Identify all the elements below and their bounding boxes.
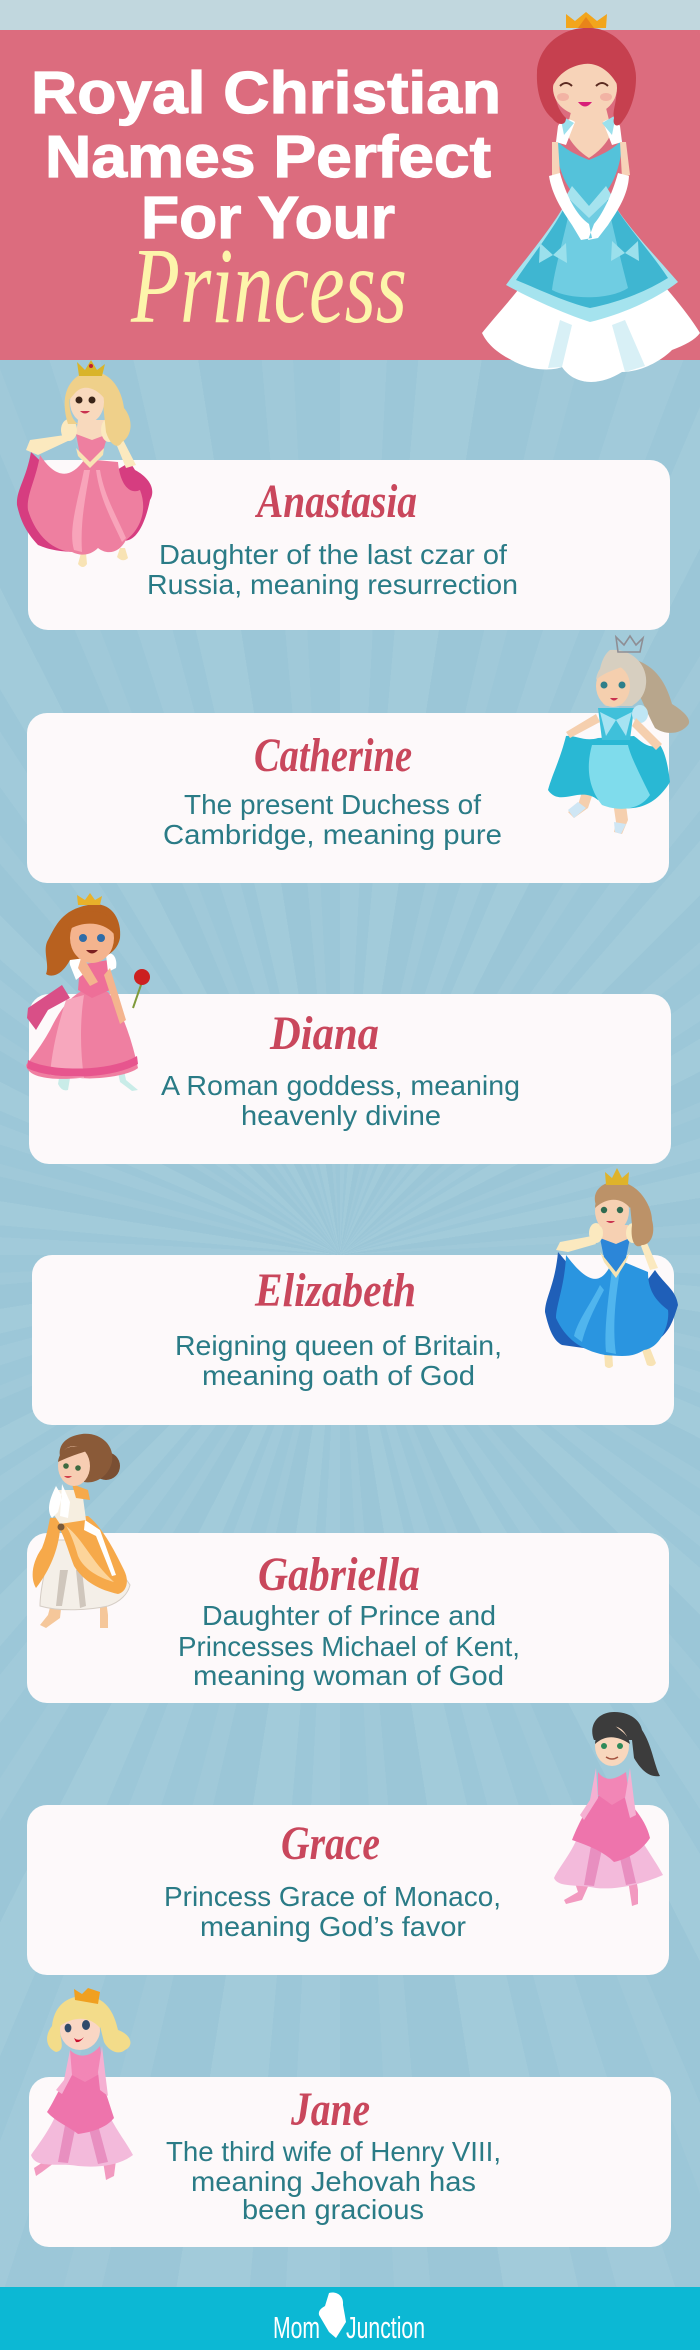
icon: princess in orange and white gown xyxy=(33,1434,130,1628)
description: Jane: The third wife of Henry VIII, xyxy=(166,2136,501,2167)
name: Gabriella: Gabriella xyxy=(258,1548,420,1601)
card: Catherine xyxy=(27,713,669,883)
description: Diana: heavenly divine xyxy=(241,1100,441,1131)
name: Diana: Diana xyxy=(269,1007,379,1060)
description: Anastasia: Russia, meaning resurrection xyxy=(147,569,518,600)
description: Grace xyxy=(164,1881,501,1942)
description: Diana: A Roman goddess, meaning xyxy=(161,1070,520,1101)
card: Jane xyxy=(29,2077,671,2247)
description: Gabriella: Daughter of Prince and xyxy=(202,1600,496,1631)
icon: princess in pink gown, blonde xyxy=(17,360,152,567)
logo: MomJunction: Junction xyxy=(346,2310,425,2345)
description: Grace: meaning God’s favor xyxy=(200,1911,466,1942)
icon: princess in pink gown, black ponytail xyxy=(554,1712,663,1906)
icon: princess in pink gown, blonde curls xyxy=(31,1988,133,2180)
description: Jane: meaning Jehovah has xyxy=(191,2166,476,2197)
header banner xyxy=(0,30,700,360)
icon: princess with rose in pink dress xyxy=(26,893,150,1091)
description: Grace: Princess Grace of Monaco, xyxy=(164,1881,501,1912)
card: Anastasia xyxy=(28,460,670,630)
name: Catherine: Catherine xyxy=(254,729,412,782)
description: Anastasia xyxy=(147,539,518,600)
card: Diana xyxy=(29,994,671,1164)
card: Gabriella xyxy=(27,1533,669,1703)
logo: MomJunction: Mom xyxy=(273,2310,320,2345)
description: Elizabeth: Reigning queen of Britain, xyxy=(175,1330,502,1361)
description: Elizabeth: meaning oath of God xyxy=(202,1360,475,1391)
description: Gabriella xyxy=(178,1600,520,1691)
description: Catherine xyxy=(163,789,502,850)
description: Jane: been gracious xyxy=(242,2194,424,2225)
title: Princess xyxy=(130,227,407,346)
description: Gabriella: meaning woman of God xyxy=(193,1660,504,1691)
logo: MomJunction xyxy=(273,2293,425,2345)
name: Anastasia: Anastasia xyxy=(255,475,417,528)
name: Elizabeth: Elizabeth xyxy=(254,1264,416,1317)
title xyxy=(31,60,501,346)
title: For Your xyxy=(141,185,395,251)
description: Jane xyxy=(166,2136,501,2225)
footer bar xyxy=(0,2287,700,2350)
description: Catherine: The present Duchess of xyxy=(184,789,481,820)
icon: princess in teal dress, silver ponytail xyxy=(548,636,689,834)
description: Catherine: Cambridge, meaning pure xyxy=(163,819,502,850)
icon: header princess in teal gown xyxy=(482,12,700,382)
description: Elizabeth xyxy=(175,1330,502,1391)
description: Diana xyxy=(161,1070,520,1131)
description: Anastasia: Daughter of the last czar of xyxy=(159,539,507,570)
name: Jane: Jane xyxy=(290,2083,370,2136)
description: Gabriella: Princesses Michael of Kent, xyxy=(178,1631,520,1662)
title: Names Perfect xyxy=(45,124,491,190)
card: Grace xyxy=(27,1805,669,1975)
icon: princess in blue gown xyxy=(545,1168,678,1368)
name: Grace: Grace xyxy=(281,1817,380,1870)
title: Royal Christian xyxy=(31,60,501,126)
card: Elizabeth xyxy=(32,1255,674,1425)
top band xyxy=(0,0,700,30)
